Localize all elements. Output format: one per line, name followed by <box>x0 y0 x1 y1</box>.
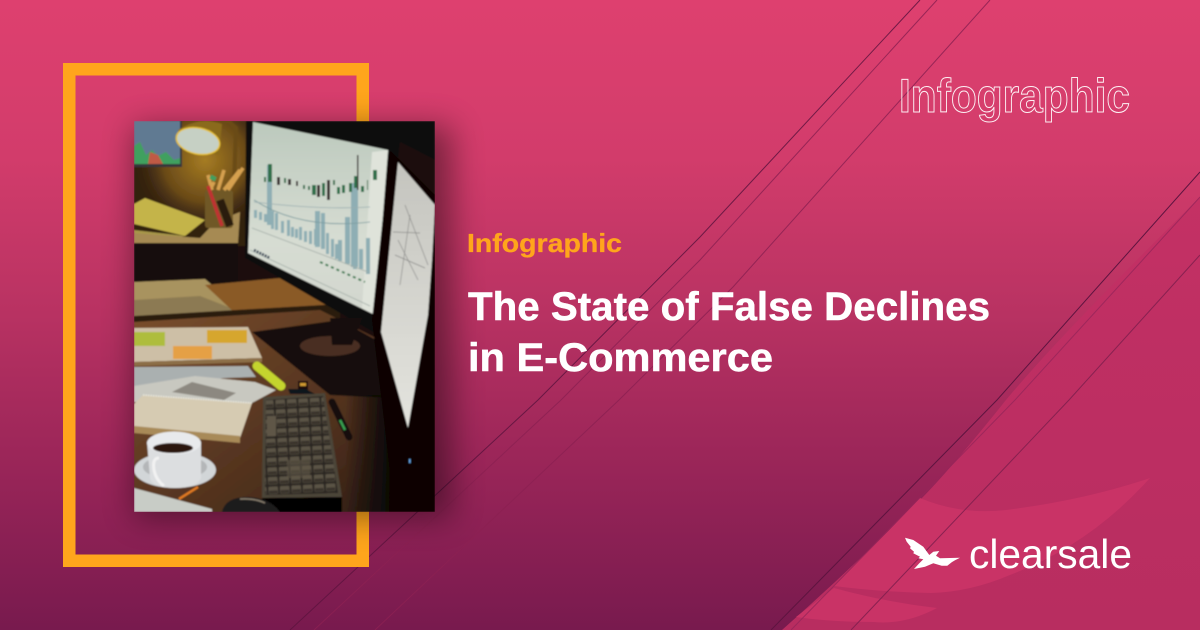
monitor stand <box>252 320 392 398</box>
main monitor screen <box>248 122 388 315</box>
bottom status LED <box>409 459 410 463</box>
keyboard <box>262 393 342 512</box>
pink corner panel <box>771 172 1200 630</box>
wordmark: clearsale <box>969 531 1132 577</box>
bar chart on screen <box>254 165 370 274</box>
back desk surface <box>134 212 240 243</box>
pencil <box>179 487 198 499</box>
stylus <box>332 402 349 437</box>
coffee cup and saucer <box>134 432 216 488</box>
candlesticks on screen <box>264 155 377 200</box>
logo: clearsale <box>905 531 1132 577</box>
small label: Infographic: Infographic <box>467 228 622 258</box>
notebook <box>134 395 252 443</box>
small back monitor <box>134 121 182 167</box>
title: The State of False Declines <box>468 285 990 329</box>
outlined heading: Infographic: Infographic <box>899 69 1130 122</box>
main desk surface <box>134 310 400 512</box>
orange frame <box>63 63 369 567</box>
photo: desk with monitors <box>134 90 435 512</box>
loose papers <box>134 366 256 388</box>
title <box>468 285 990 380</box>
photo drop shadow <box>134 126 452 518</box>
main monitor bezel <box>245 121 435 335</box>
side monitor <box>381 162 435 428</box>
bottom-left paper <box>134 488 212 512</box>
wall with lamp glow <box>134 121 254 246</box>
highlighter <box>257 366 281 386</box>
moving average lines <box>254 200 370 224</box>
lower panel on screen <box>250 228 370 306</box>
small clip <box>298 381 308 390</box>
desk lamp <box>174 121 238 174</box>
pencil cup <box>205 168 243 228</box>
lower-left stacked papers and tray <box>134 278 232 318</box>
title: in E-Commerce <box>468 336 773 380</box>
yellow papers <box>134 198 205 236</box>
right dark shade <box>347 394 396 512</box>
mouse <box>222 497 280 512</box>
icon: bird <box>905 538 960 569</box>
diagonal lines: left group <box>290 0 990 630</box>
swoosh shapes <box>834 478 1150 593</box>
note sheet with sticky notes <box>134 327 262 366</box>
